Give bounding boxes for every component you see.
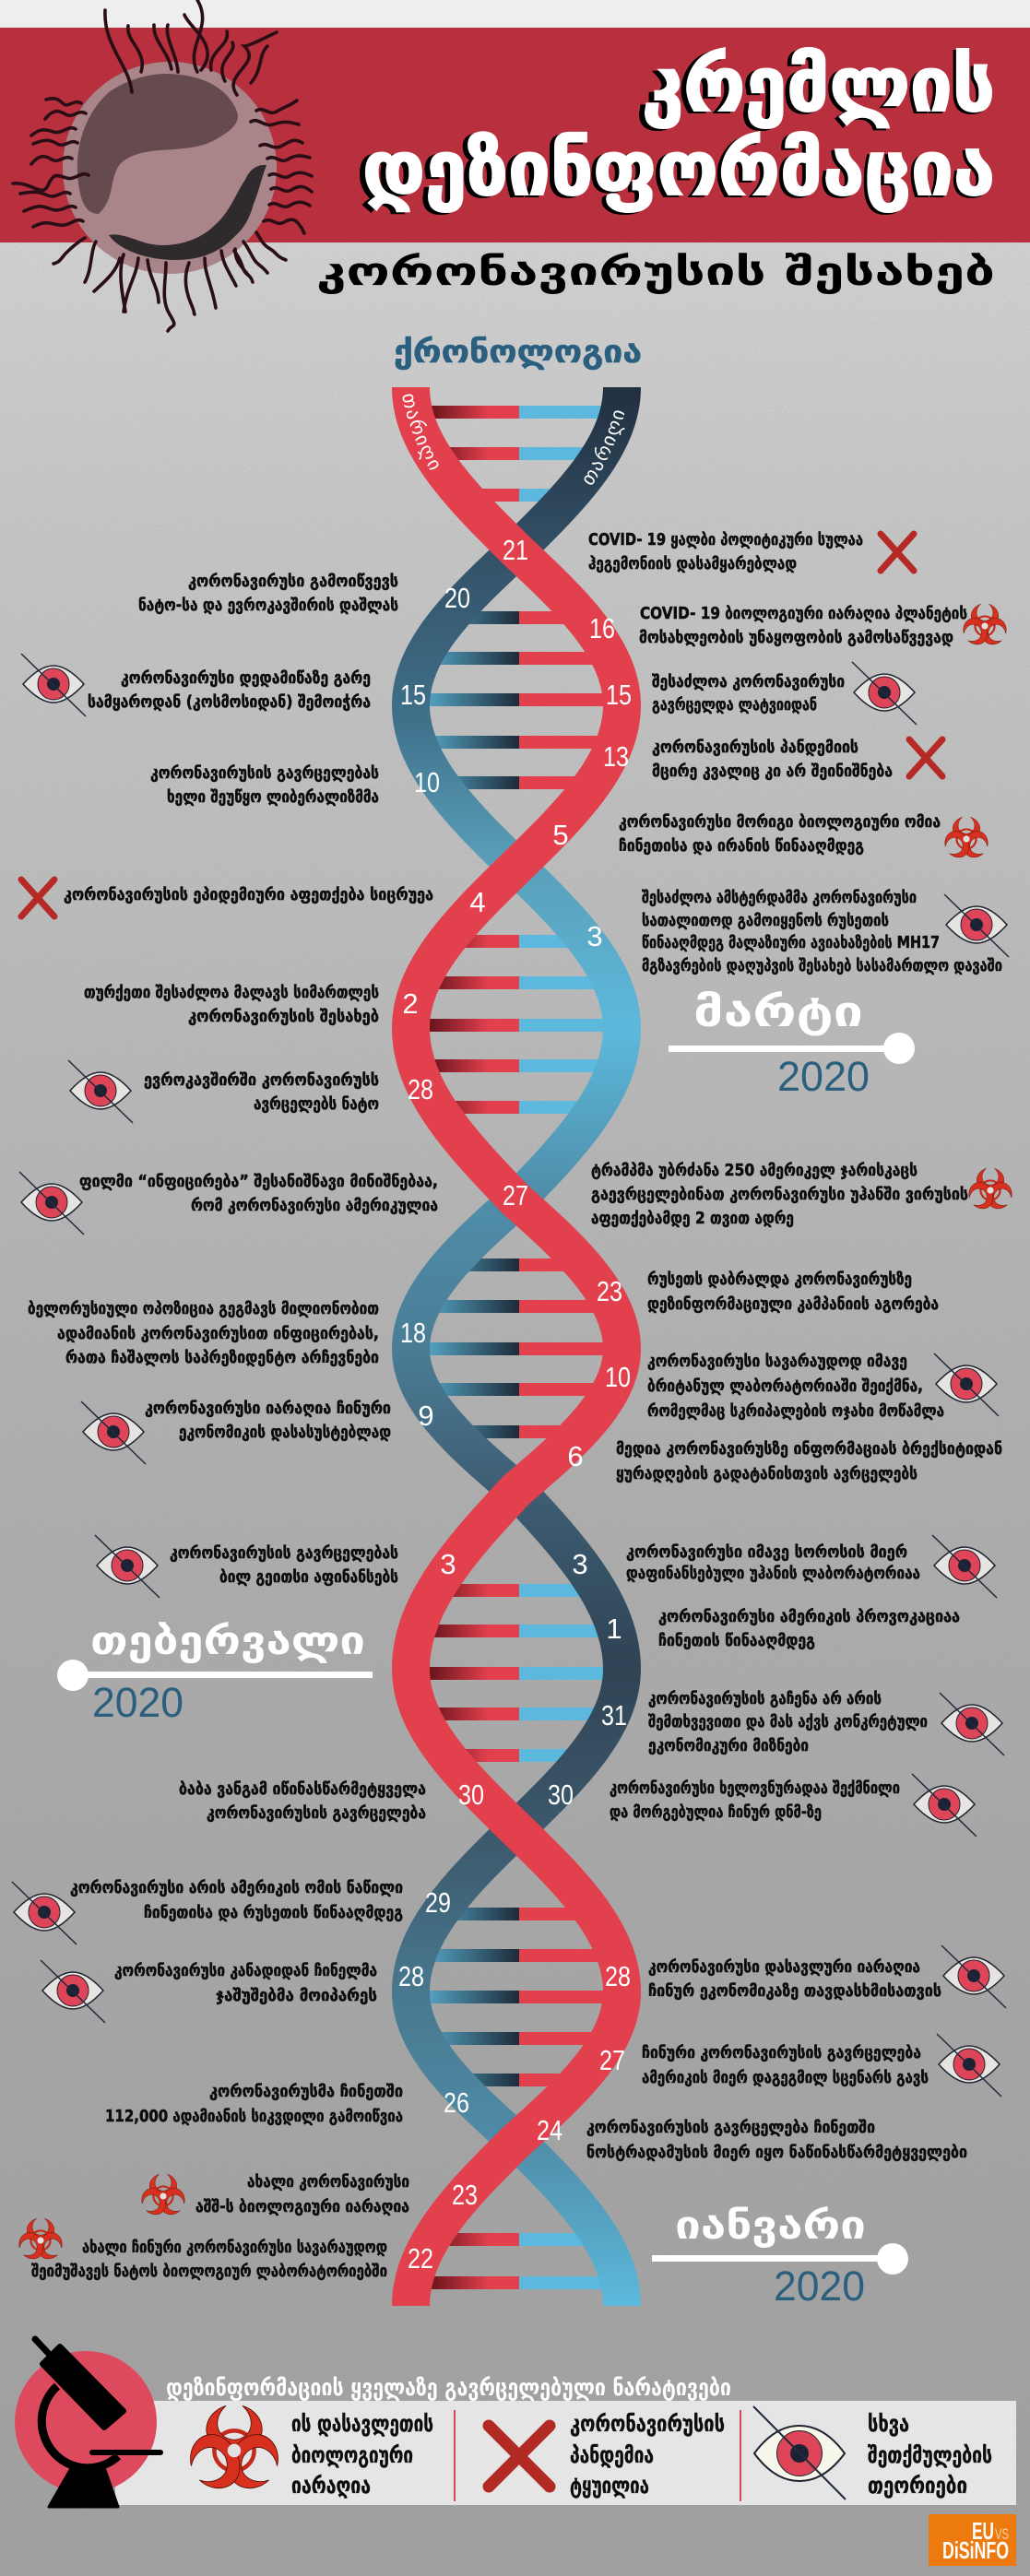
date numbers on helix: 6 bbox=[567, 1440, 584, 1472]
legend: pandemic is a lie: ტყუილია bbox=[570, 2473, 649, 2499]
legend panel bbox=[115, 2401, 1016, 2505]
text: British lab bbox=[647, 1352, 944, 1421]
icon: eye bbox=[941, 1945, 1006, 2008]
text: Baba Vanga: ბაბა ვანგამ იწინასწარმეტყველა bbox=[179, 1779, 426, 1799]
text: Soros lab: კორონავირუსი იმავე სოროსის მიერ bbox=[626, 1542, 907, 1562]
logo: EUvsDiSiNFO bbox=[929, 2514, 1016, 2566]
date numbers on helix: 26 bbox=[444, 2086, 469, 2119]
date numbers on helix: 15 bbox=[400, 679, 426, 711]
text: stolen from Canada: კორონავირუსი კანადიდან ჩინელმა bbox=[114, 1961, 377, 1980]
text: Turkey bbox=[84, 983, 379, 1026]
text: film Contagion: ფილმი “ინფიცირება” შესანიშნავი მინიშნებაა, bbox=[79, 1172, 438, 1191]
text: economic goals: კორონავირუსის გაჩენა არ არის bbox=[648, 1689, 882, 1708]
top light strip bbox=[0, 0, 1030, 28]
text: weapon against Chinese economy bbox=[145, 1399, 391, 1442]
text: Trump ordered soldiers: აფეთქებამდე 2 თვით ადრე bbox=[591, 1209, 794, 1228]
icon: eye bbox=[68, 1060, 133, 1123]
date numbers on helix: 24 bbox=[537, 2114, 562, 2146]
text: liberalism: ხელი შეუწყო ლიბერალიზმმა bbox=[167, 787, 379, 807]
text: stolen from Canada bbox=[114, 1961, 377, 2005]
title: კრემლის bbox=[636, 43, 992, 131]
text: US biological weapon: ახალი კორონავირუსი bbox=[247, 2172, 409, 2192]
icon: eye bbox=[81, 1401, 146, 1464]
text: American scenario bbox=[642, 2043, 929, 2087]
text: Brexit distraction: ყურადღების გადატანისთვის ავრცელებს bbox=[616, 1464, 918, 1483]
title: კრემლის bbox=[642, 41, 995, 129]
date numbers on helix: 28 bbox=[408, 1073, 433, 1105]
date numbers on helix: 3 bbox=[440, 1548, 456, 1580]
text: biological war: კორონავირუსი მორიგი ბიოლოგიური ომია bbox=[619, 812, 941, 832]
legend: biological weapon: იარაღია bbox=[291, 2473, 371, 2499]
text: stolen from Canada: ჯაშუშებმა მოიპარეს bbox=[216, 1986, 377, 2005]
text: NATO spreads in EU: ევროკავშირში კორონავირუსს bbox=[144, 1070, 379, 1090]
legend: pandemic is a lie bbox=[489, 2411, 725, 2499]
text: Russia accused: რუსეთს დაბრალდა კორონავირუსზე bbox=[647, 1270, 912, 1289]
legend: other conspiracy theories: შეთქმულების bbox=[868, 2442, 992, 2468]
text: from outer space: სამყაროდან (კოსმოსიდან) შემოიჭრა bbox=[88, 692, 371, 712]
icon: biohazard bbox=[959, 604, 1011, 649]
date numbers on helix: 20 bbox=[444, 582, 470, 614]
text: biological war bbox=[619, 812, 941, 856]
text: Turkey: კორონავირუსის შესახებ bbox=[188, 1007, 379, 1026]
text: British lab: რომელმაც სკრიპალების ოჯახი მოწამლა bbox=[647, 1401, 944, 1421]
icon: eye bbox=[12, 1882, 77, 1944]
red strand bbox=[411, 387, 622, 2306]
text: Russia accused bbox=[647, 1270, 939, 1314]
text: Bill Gates bbox=[170, 1543, 398, 1587]
icon: cross bbox=[21, 880, 54, 916]
text: American scenario: ამერიკის მიერ დაგეგმილ სცენარს გავს bbox=[642, 2068, 929, 2087]
text: from Latvia: შესაძლოა კორონავირუსი bbox=[652, 672, 845, 691]
text: Bill Gates: კორონავირუსის გავრცელებას bbox=[170, 1543, 398, 1563]
text: Brexit distraction bbox=[616, 1439, 1002, 1483]
text: Turkey: თურქეთი შესაძლოა მალავს სიმართლეს bbox=[84, 983, 379, 1002]
date numbers on helix: 5 bbox=[552, 819, 569, 851]
icon: biohazard bbox=[965, 1168, 1016, 1213]
legend: biological weapon: ის დასავლეთის bbox=[291, 2411, 433, 2437]
text: from outer space bbox=[88, 668, 371, 712]
text: 112,000 deaths: 112,000 ადამიანის სიკვდილი გამოიწვია bbox=[105, 2107, 403, 2126]
text: Belarus opposition: ბელორუსიული ოპოზიცია გეგმავს მილიონობით bbox=[28, 1299, 379, 1318]
icon: cross bbox=[909, 739, 942, 776]
text: infertility weapon bbox=[639, 604, 967, 647]
text: 112,000 deaths: კორონავირუსმა ჩინეთში bbox=[209, 2082, 403, 2101]
text: American provocation bbox=[658, 1607, 960, 1650]
text: artificial and DNA bbox=[610, 1778, 900, 1822]
text: Western weapon: ჩინურ ეკონომიკაზე თავდასხმისათვის bbox=[648, 1981, 941, 2001]
text: artificial and DNA: კორონავირუსი ხელოვნურადაა შექმნილი bbox=[610, 1778, 900, 1798]
text: no trace of pandemic: კორონავირუსის პანდემიის bbox=[652, 738, 858, 757]
text: Nostradamus: ნოსტრადამუსის მიერ იყო ნაწინასწარმეტყველები bbox=[586, 2143, 967, 2162]
date numbers on helix: 31 bbox=[601, 1699, 627, 1731]
rungs bbox=[410, 406, 622, 2289]
text: Belarus opposition bbox=[28, 1299, 379, 1367]
text: Amsterdam MH17: წინააღმდეგ მალაზიური ავიახაზების MH17 bbox=[642, 933, 940, 952]
logo: EUvsDiSiNFO: VS bbox=[995, 2525, 1009, 2543]
month marker: February bbox=[57, 1618, 373, 1726]
date numbers on helix: 27 bbox=[599, 2044, 625, 2076]
icon: microscope bbox=[15, 2339, 160, 2507]
text: Belarus opposition: ადამიანის კორონავირუსით ინფიცირებას, bbox=[57, 1324, 379, 1343]
subtitle: კორონავირუსის შესახებ bbox=[316, 249, 995, 294]
text: Amsterdam MH17: შესაძლოა ამსტერდამმა კორონავირუსი bbox=[642, 888, 917, 907]
date numbers on helix: 10 bbox=[414, 766, 440, 798]
text: part of American war: კორონავირუსი არის ამერიკის ომის ნაწილი bbox=[70, 1878, 403, 1897]
text: Nostradamus: კორონავირუსის გავრცელება ჩინეთში bbox=[586, 2118, 875, 2137]
strand labels: თარიღი bbox=[402, 395, 439, 470]
text: film Contagion: რომ კორონავირუსი ამერიკულია bbox=[191, 1196, 438, 1215]
legend: biological weapon: ბიოლოგიური bbox=[291, 2442, 413, 2468]
text: political weapon: ჰეგემონიის დასამყარებლად bbox=[588, 554, 797, 573]
date numbers on helix: 3 bbox=[572, 1548, 588, 1580]
month marker: January bbox=[652, 2203, 908, 2310]
legend: biological weapon bbox=[182, 2405, 433, 2499]
date numbers on helix: 2 bbox=[402, 987, 419, 1020]
icon: biohazard bbox=[941, 817, 992, 862]
text: part of American war: ჩინეთისა და რუსეთის წინააღმდეგ bbox=[144, 1903, 403, 1922]
icon: biohazard bbox=[15, 2218, 66, 2263]
text: NATO spreads in EU: ავრცელებს ნატო bbox=[254, 1094, 379, 1114]
text: NATO spreads in EU bbox=[144, 1070, 379, 1114]
text: Russia accused: დეზინფორმაციული კამპანიის აგორება bbox=[647, 1294, 939, 1314]
text: Trump ordered soldiers: გაევრცელებინათ კორონავირუსი უჰანში ვირუსის bbox=[591, 1185, 968, 1204]
legend: other conspiracy theories bbox=[753, 2406, 992, 2499]
date numbers on helix: 29 bbox=[425, 1886, 451, 1919]
text: Amsterdam MH17: სათალითოდ გამოიყენოს რუსეთის bbox=[642, 911, 889, 930]
icon: eye bbox=[932, 1535, 997, 1598]
text: British lab: ბრიტანულ ლაბორატორიაში შეიქმნა, bbox=[647, 1377, 923, 1396]
blue strand bbox=[411, 387, 622, 2306]
text: NATO laboratories: ახალი ჩინური კორონავირუსი სავარაუდოდ bbox=[82, 2238, 387, 2257]
icon: eye bbox=[95, 1535, 160, 1598]
legend heading: დეზინფორმაციის ყველაზე გავრცელებული ნარატივები bbox=[166, 2374, 731, 2401]
month marker: March: 2020 bbox=[777, 1053, 870, 1100]
date numbers on helix: 10 bbox=[605, 1361, 631, 1393]
text: political weapon: COVID- 19 ყალბი პოლიტიკური სულაა bbox=[588, 530, 863, 549]
icon: eye bbox=[21, 654, 86, 716]
icon: eye bbox=[944, 894, 1009, 957]
text: Western weapon: კორონავირუსი დასავლური იარაღია bbox=[648, 1957, 920, 1977]
text: American provocation: ჩინეთის წინააღმდეგ bbox=[658, 1631, 815, 1650]
date numbers on helix: 22 bbox=[408, 2242, 433, 2275]
date numbers on helix: 4 bbox=[469, 886, 486, 918]
text: film Contagion bbox=[79, 1172, 438, 1215]
icon: eye bbox=[934, 1353, 999, 1416]
title: დეზინფორმაცია bbox=[362, 125, 995, 213]
date numbers on helix bbox=[398, 534, 632, 2275]
text: infertility weapon: მოსახლეობის უნაყოფობის გამოსაწვევად bbox=[639, 628, 953, 647]
month marker: January: იანვარი bbox=[675, 2203, 866, 2248]
heading: chronology: ქრონოლოგია bbox=[394, 334, 642, 371]
icon: coronavirus bbox=[13, 0, 312, 331]
text: British lab: კორონავირუსი სავარაუდოდ იმავე bbox=[647, 1352, 907, 1371]
text: American provocation: კორონავირუსი ამერიკის პროვოკაციაა bbox=[658, 1607, 960, 1626]
text: Soros lab bbox=[626, 1542, 920, 1583]
legend: other conspiracy theories: სხვა bbox=[868, 2411, 909, 2437]
text: economic goals: ეკონომიკური მიზნები bbox=[648, 1736, 809, 1755]
text: Trump ordered soldiers bbox=[591, 1161, 968, 1228]
date numbers on helix: 3 bbox=[586, 920, 603, 952]
text: US biological weapon: აშშ-ს ბიოლოგიური იარაღია bbox=[195, 2197, 409, 2216]
title bbox=[357, 41, 995, 215]
icon: eye bbox=[41, 1960, 105, 2023]
month marker: March bbox=[669, 987, 915, 1100]
text: Baba Vanga: კორონავირუსის გავრცელება bbox=[207, 1803, 426, 1823]
text: NATO and EU collapse bbox=[138, 572, 398, 615]
date numbers on helix: 21 bbox=[503, 534, 528, 566]
logo: EUvsDiSiNFO: EU bbox=[972, 2517, 994, 2545]
text: Amsterdam MH17 bbox=[642, 888, 1002, 975]
text: Baba Vanga bbox=[179, 1779, 426, 1823]
icon: eye bbox=[19, 1172, 84, 1235]
text: weapon against Chinese economy: ეკონომიკის დასასუსტებლად bbox=[179, 1423, 391, 1442]
text: 112,000 deaths bbox=[105, 2082, 403, 2126]
text: Trump ordered soldiers: ტრამპმა უბრძანა 250 ამერიკელ ჯარისკაცს bbox=[591, 1161, 918, 1180]
date numbers on helix: 13 bbox=[603, 740, 629, 773]
legend: pandemic is a lie: პანდემია bbox=[570, 2442, 654, 2468]
text: NATO and EU collapse: კორონავირუსი გამოიწვევს bbox=[188, 572, 398, 591]
text: weapon against Chinese economy: კორონავირუსი იარაღია ჩინური bbox=[145, 1399, 391, 1418]
icon: eye bbox=[940, 1693, 1004, 1755]
date numbers on helix: 28 bbox=[605, 1960, 631, 1992]
text: political weapon bbox=[588, 530, 863, 573]
month marker: February: 2020 bbox=[92, 1679, 184, 1726]
text: economic goals bbox=[648, 1689, 928, 1755]
date numbers on helix: 16 bbox=[589, 612, 615, 644]
text: outbreak is a lie: კორონავირუსის ეპიდემიური აფეთქება სიცრუეა bbox=[64, 885, 433, 904]
month marker: January: 2020 bbox=[774, 2263, 865, 2310]
text: NATO laboratories: შეიმუშავეს ნატოს ბიოლოგიურ ლაბორატორიებში bbox=[31, 2262, 387, 2281]
date numbers on helix: 28 bbox=[398, 1960, 424, 1992]
text: Nostradamus bbox=[586, 2118, 967, 2162]
date numbers on helix: 30 bbox=[548, 1778, 574, 1811]
text: from Latvia bbox=[652, 672, 845, 715]
legend: pandemic is a lie: კორონავირუსის bbox=[570, 2411, 725, 2437]
text: American scenario: ჩინური კორონავირუსის გავრცელება bbox=[642, 2043, 921, 2062]
date numbers on helix: 23 bbox=[597, 1275, 622, 1307]
text: US biological weapon bbox=[195, 2172, 409, 2216]
icon: eye bbox=[852, 662, 917, 725]
text: Soros lab: დაფინანსებული უჰანის ლაბორატორიაა bbox=[626, 1564, 920, 1583]
text: from outer space: კორონავირუსი დედამიწაზე გარე bbox=[121, 668, 371, 688]
text: artificial and DNA: და მორგებულია ჩინურ დნმ-ზე bbox=[610, 1802, 822, 1822]
text: biological war: ჩინეთისა და ირანის წინააღმდეგ bbox=[619, 836, 864, 856]
DNA helix bbox=[410, 387, 622, 2306]
text: no trace of pandemic: მცირე კვალიც კი არ შეინიშნება bbox=[652, 762, 893, 781]
text: Bill Gates: ბილ გეითსი აფინანსებს bbox=[219, 1567, 398, 1587]
date numbers on helix: 30 bbox=[458, 1778, 484, 1811]
legend: other conspiracy theories: თეორიები bbox=[868, 2473, 967, 2499]
text: liberalism: კორონავირუსის გავრცელებას bbox=[150, 763, 379, 783]
icon: cross bbox=[881, 534, 914, 571]
date numbers on helix: 23 bbox=[452, 2179, 478, 2211]
icon: eye bbox=[912, 1774, 977, 1837]
text: NATO and EU collapse: ნატო-სა და ევროკავშირის დაშლას bbox=[138, 596, 398, 615]
icon: biohazard bbox=[137, 2174, 189, 2219]
text: infertility weapon: COVID- 19 ბიოლოგიური იარაღია პლანეტის bbox=[640, 604, 967, 623]
icon: eye bbox=[937, 2034, 1001, 2097]
strand labels: თარიღი bbox=[585, 410, 625, 485]
text: liberalism bbox=[150, 763, 379, 807]
date numbers on helix: 18 bbox=[400, 1317, 426, 1349]
text: NATO laboratories bbox=[31, 2238, 387, 2281]
date numbers on helix: 9 bbox=[418, 1400, 434, 1432]
date numbers on helix: 1 bbox=[606, 1613, 622, 1645]
month marker: February: თებერვალი bbox=[90, 1618, 365, 1663]
text: economic goals: შემთხვევითი და მას აქვს კონკრეტული bbox=[648, 1712, 928, 1731]
date numbers on helix: 27 bbox=[503, 1179, 528, 1211]
text: Western weapon bbox=[648, 1957, 941, 2001]
text: Belarus opposition: რათა ჩაშალოს საპრეზიდენტო არჩევნები bbox=[65, 1348, 379, 1367]
title: დეზინფორმაცია bbox=[357, 127, 992, 215]
text: from Latvia: გავრცელდა ლატვიიდან bbox=[652, 695, 817, 715]
text: no trace of pandemic bbox=[652, 738, 893, 781]
month marker: March: მარტი bbox=[693, 987, 863, 1036]
strand labels bbox=[402, 395, 625, 485]
date numbers on helix: 15 bbox=[606, 679, 632, 711]
text: part of American war bbox=[70, 1878, 403, 1922]
header band bbox=[0, 28, 1030, 242]
